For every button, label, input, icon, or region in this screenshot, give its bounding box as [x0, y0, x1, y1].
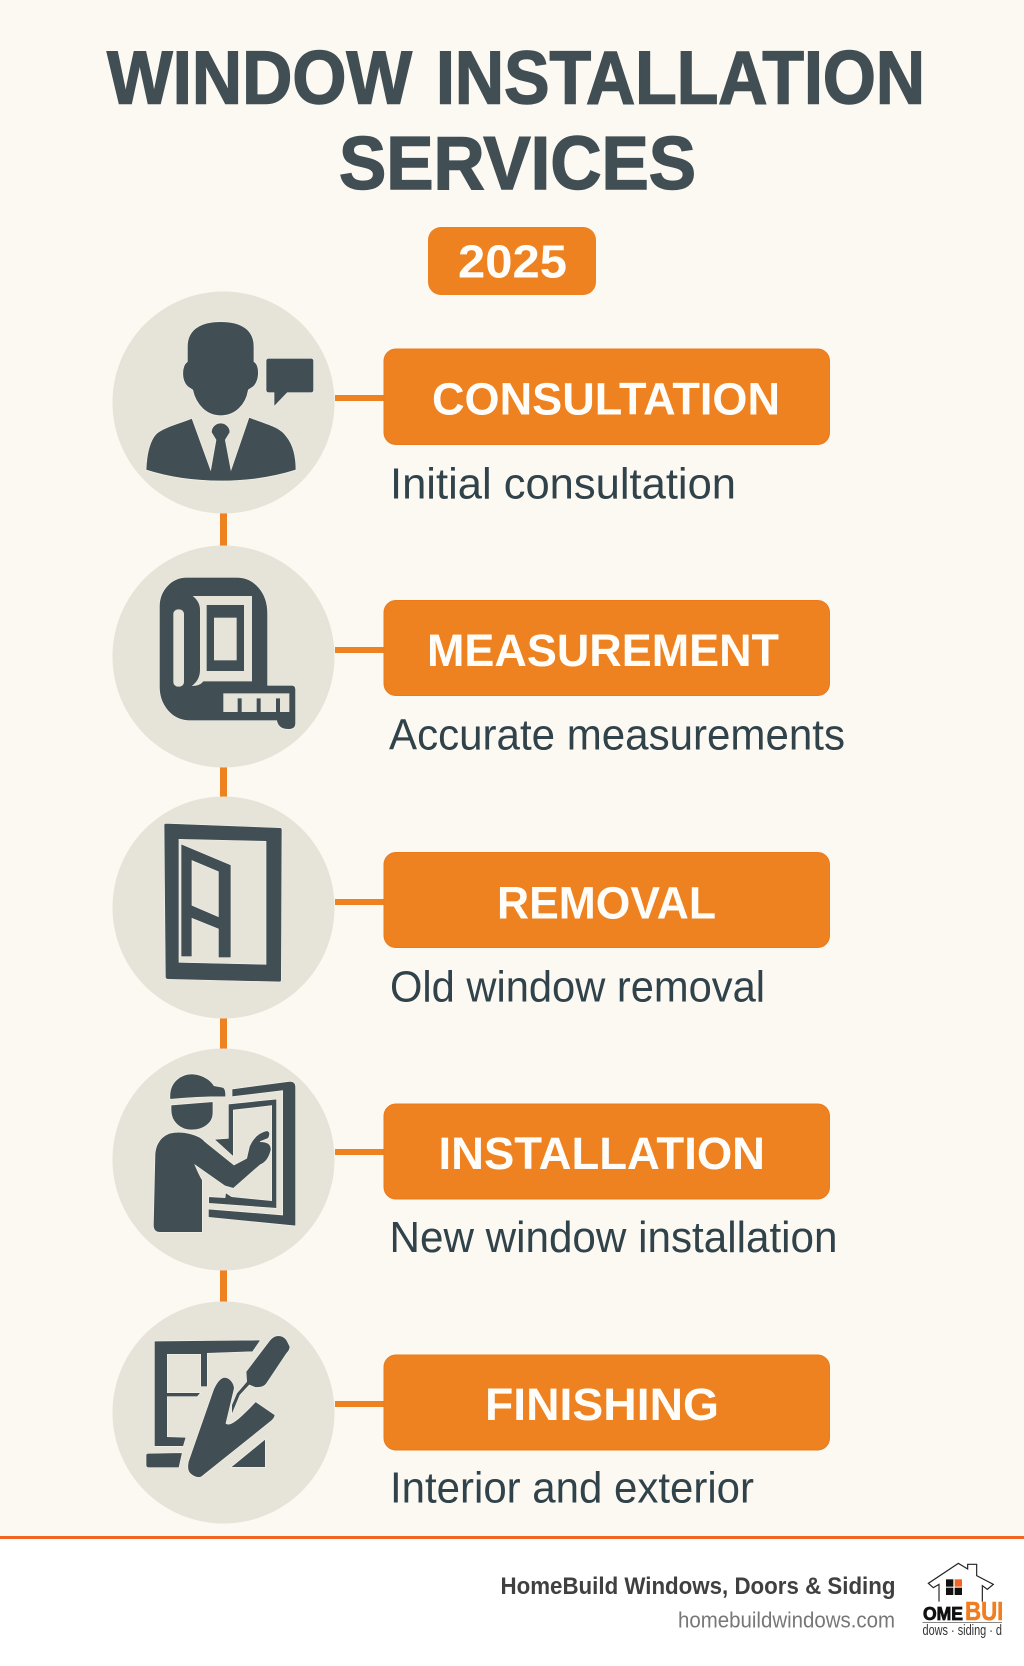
description: Old window removal	[390, 962, 765, 1012]
step 5: finishing	[112, 1302, 830, 1524]
description: Interior and exterior	[390, 1464, 754, 1512]
label bar	[384, 1355, 830, 1450]
circle with installer icon	[112, 1048, 334, 1270]
step 3: removal	[112, 796, 830, 1018]
label bar	[384, 600, 830, 696]
title: INSTALLATION	[436, 36, 925, 120]
year badge: 2025	[458, 236, 567, 288]
label bar	[384, 1104, 830, 1199]
circle with trowel icon	[112, 1302, 334, 1524]
title: WINDOW	[107, 36, 412, 120]
circle with window frame icon	[112, 796, 334, 1018]
circle with consultant icon	[112, 292, 334, 514]
logo: BUIL	[965, 1596, 1017, 1626]
label bar: REMOVAL	[497, 878, 716, 928]
logo	[922, 1562, 1002, 1638]
label bar	[384, 852, 830, 948]
connector	[335, 1149, 384, 1155]
step 4: installation	[112, 1048, 838, 1270]
label bar: INSTALLATION	[438, 1128, 765, 1179]
connector	[335, 395, 384, 401]
connector	[335, 647, 384, 653]
website: homebuildwindows.com	[678, 1608, 895, 1632]
company name: HomeBuild Windows, Doors & Siding	[500, 1573, 896, 1600]
logo: OME	[923, 1604, 963, 1624]
connector	[335, 1401, 384, 1407]
label bar: CONSULTATION	[432, 374, 780, 424]
connector	[335, 899, 384, 905]
footer	[0, 1536, 1024, 1666]
label bar: MEASUREMENT	[427, 625, 779, 676]
step 2: measurement	[112, 546, 845, 768]
description: Accurate measurements	[389, 710, 845, 760]
title: SERVICES	[339, 121, 696, 205]
label bar: FINISHING	[485, 1379, 719, 1430]
title	[107, 36, 925, 205]
year badge	[428, 227, 596, 295]
circle with tape measure icon	[112, 546, 334, 768]
label bar	[384, 349, 830, 444]
step 1: consultation	[112, 292, 830, 514]
description: Initial consultation	[390, 460, 736, 508]
vertical connectors	[220, 513, 227, 1302]
description: New window installation	[390, 1213, 838, 1262]
